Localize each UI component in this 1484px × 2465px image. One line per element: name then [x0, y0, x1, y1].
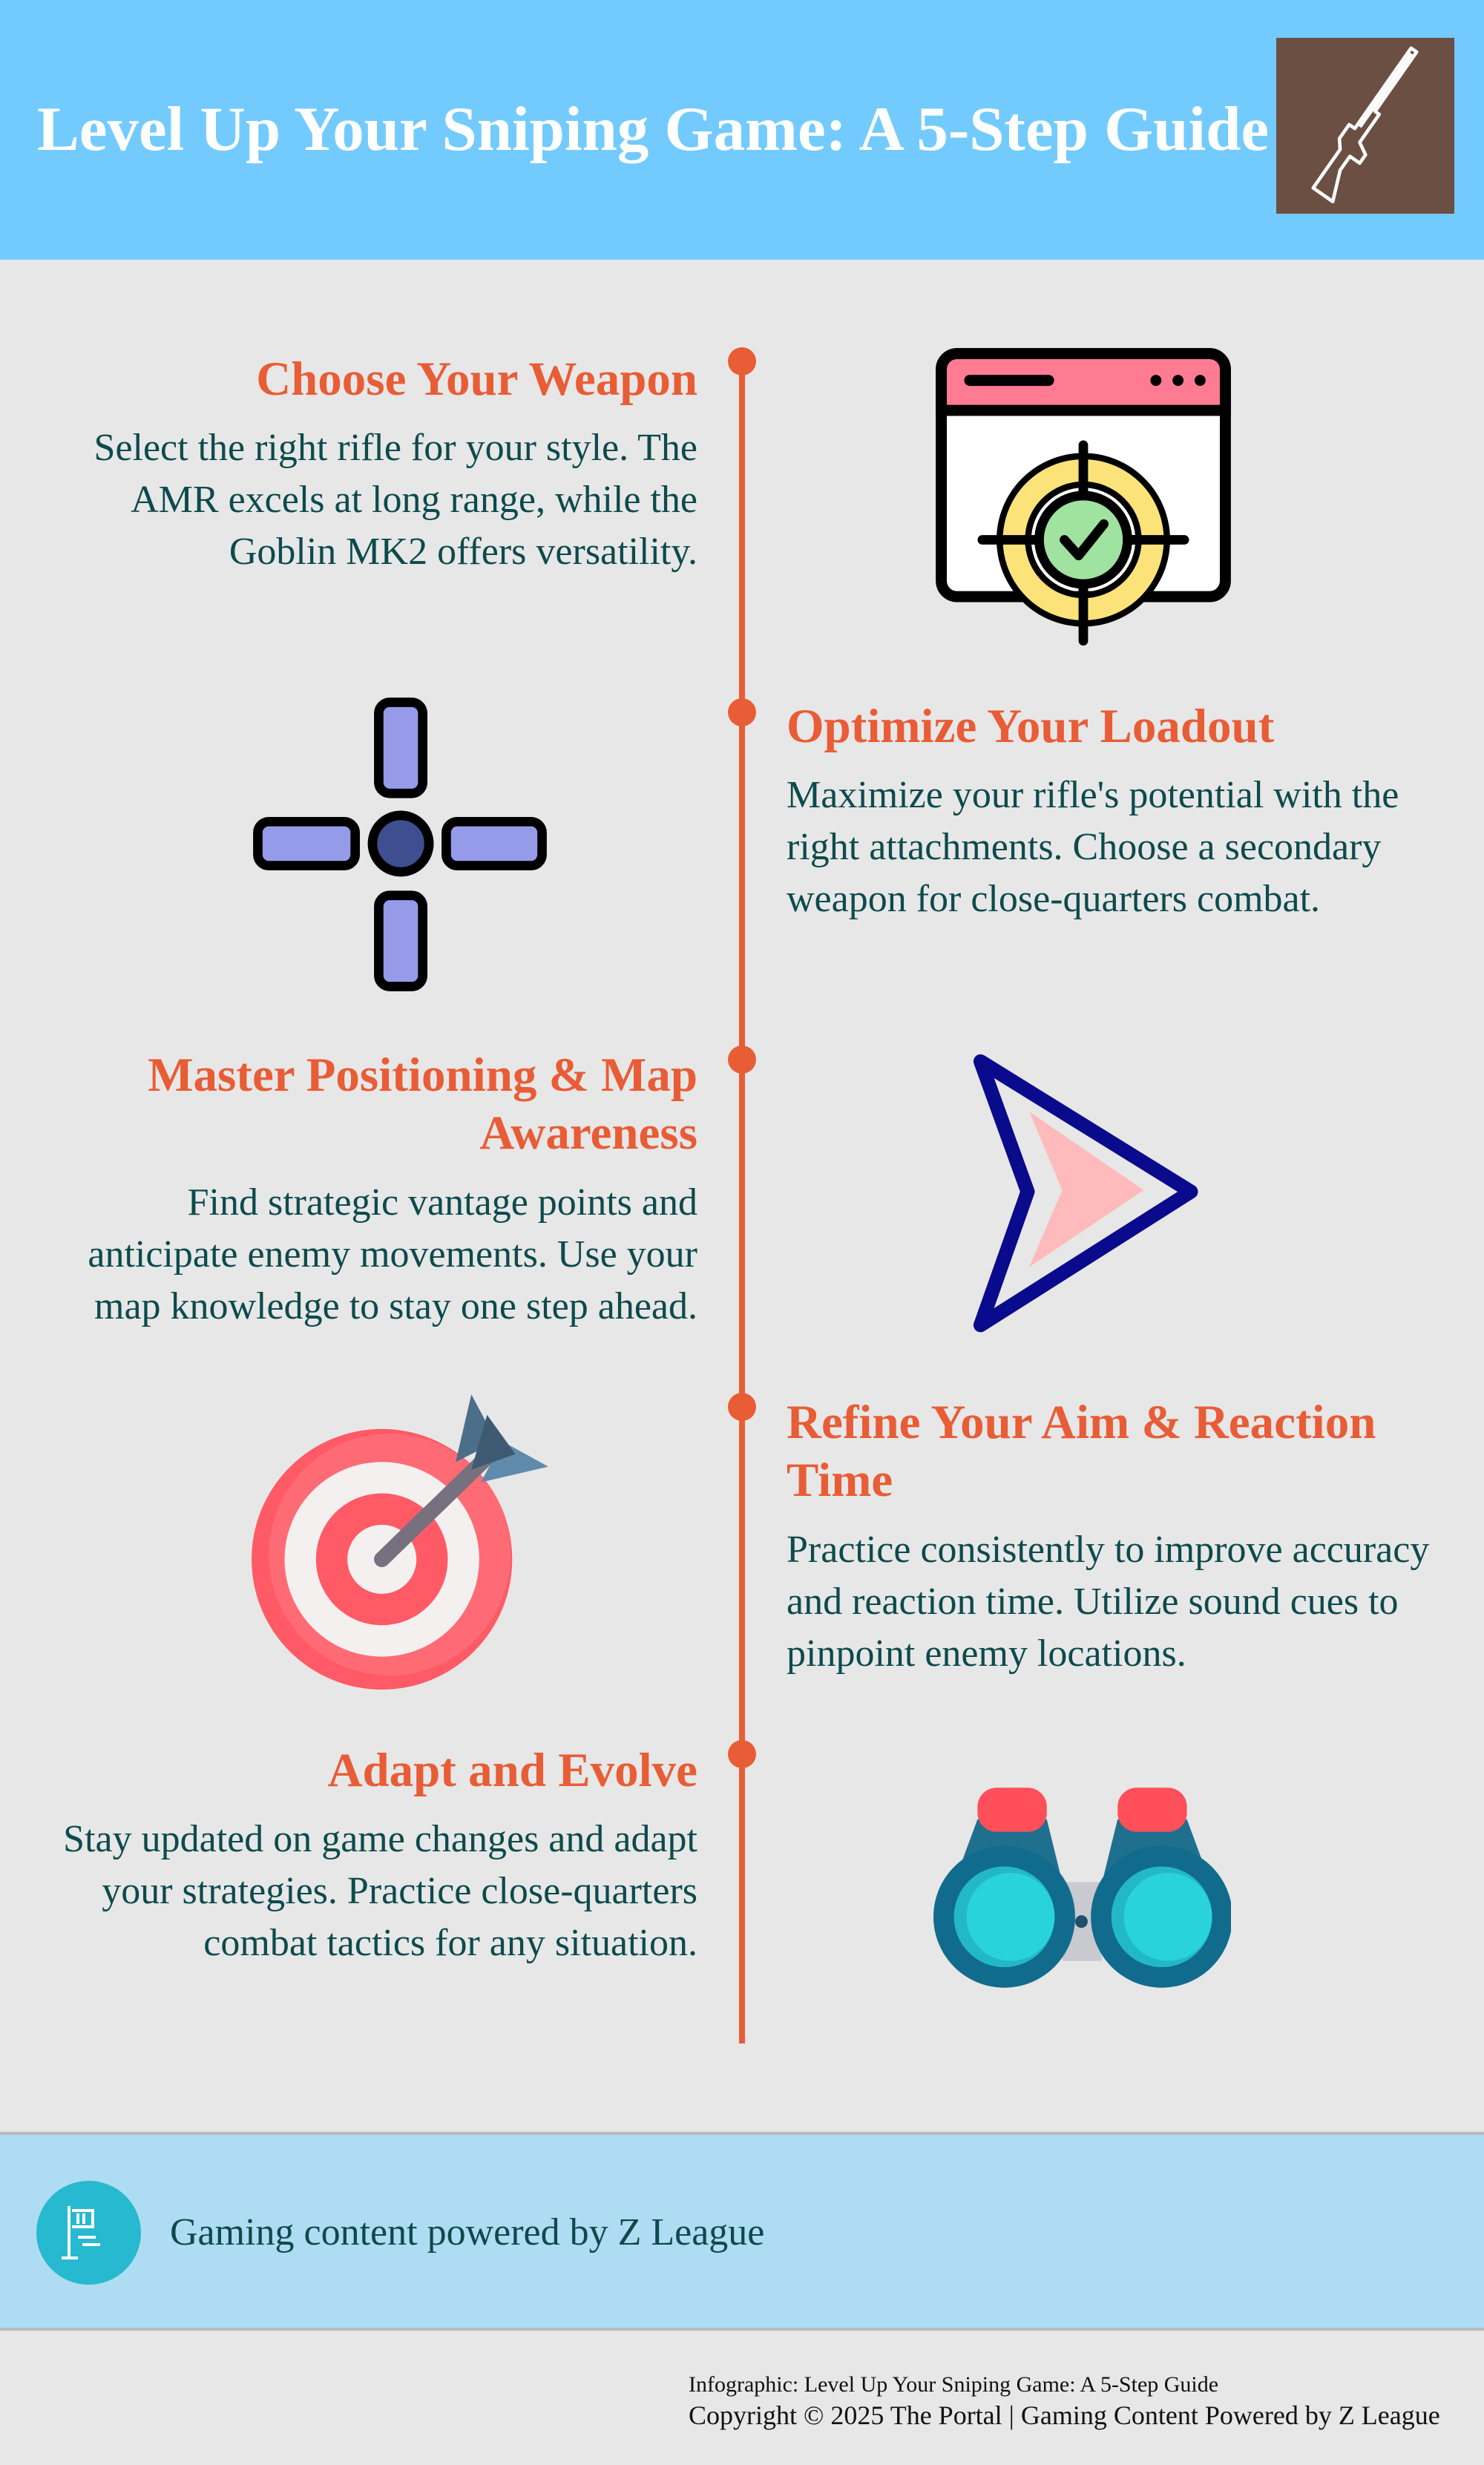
step 1 heading: Choose Your Weapon — [256, 352, 697, 406]
step 4 heading: Time — [787, 1454, 893, 1507]
step 5 text: Stay updated on game changes and adapt — [63, 1818, 697, 1860]
footer credits: Infographic: Level Up Your Sniping Game: A 5-Step Guide — [689, 2372, 1218, 2397]
step 4 text: pinpoint enemy locations. — [787, 1632, 1186, 1675]
step 2 text: weapon for close-quarters combat. — [787, 878, 1320, 920]
icon: play arrow — [974, 1054, 1198, 1333]
step 4 text — [787, 1529, 1429, 1675]
step 3 text — [88, 1181, 697, 1327]
step 5 heading: Adapt and Evolve — [328, 1744, 697, 1797]
icon: browser target — [936, 348, 1231, 646]
title: Level Up Your Sniping Game: A 5-Step Guide — [37, 94, 1269, 164]
step 1 text: AMR excels at long range, while the — [131, 479, 697, 521]
step 4 heading — [787, 1396, 1376, 1507]
step 2 text: right attachments. Choose a secondary — [787, 826, 1381, 868]
icon: dartboard — [252, 1394, 548, 1690]
step 2 text — [787, 774, 1399, 920]
timeline line — [739, 361, 745, 2044]
footer credits — [689, 2372, 1440, 2430]
step 5 text: your strategies. Practice close-quarters — [102, 1870, 697, 1912]
footer credits: Copyright © 2025 The Portal | Gaming Content Powered by Z League — [689, 2400, 1440, 2430]
step 1 text: Goblin MK2 offers versatility. — [229, 531, 697, 573]
step 3 text: anticipate enemy movements. Use your — [88, 1233, 697, 1276]
step 4 text: Practice consistently to improve accuracy — [787, 1529, 1429, 1571]
sponsor text: Gaming content powered by Z League — [170, 2211, 764, 2254]
step 4 text: and reaction time. Utilize sound cues to — [787, 1581, 1399, 1623]
step 5 text: combat tactics for any situation. — [203, 1922, 697, 1964]
step 5 text — [63, 1818, 697, 1964]
icon: binoculars — [933, 1788, 1231, 1988]
timeline dots — [728, 347, 756, 1767]
step 3 heading: Master Positioning & Map — [148, 1048, 697, 1102]
icon: rifle — [1276, 38, 1454, 214]
step 4 heading: Refine Your Aim & Reaction — [787, 1396, 1376, 1449]
step 3 text: Find strategic vantage points and — [188, 1181, 697, 1224]
step 1 text: Select the right rifle for your style. The — [94, 427, 697, 469]
step 3 heading — [148, 1048, 697, 1160]
step 3 text: map knowledge to stay one step ahead. — [94, 1285, 697, 1327]
step 2 text: Maximize your rifle's potential with the — [787, 774, 1399, 816]
step 3 heading: Awareness — [479, 1106, 697, 1160]
footer band — [0, 2132, 1484, 2331]
header — [0, 0, 1484, 260]
icon: crosshair — [253, 698, 547, 991]
step 2 heading: Optimize Your Loadout — [787, 700, 1274, 753]
step 1 text — [94, 427, 697, 573]
icon: windsock circle — [36, 2181, 141, 2285]
